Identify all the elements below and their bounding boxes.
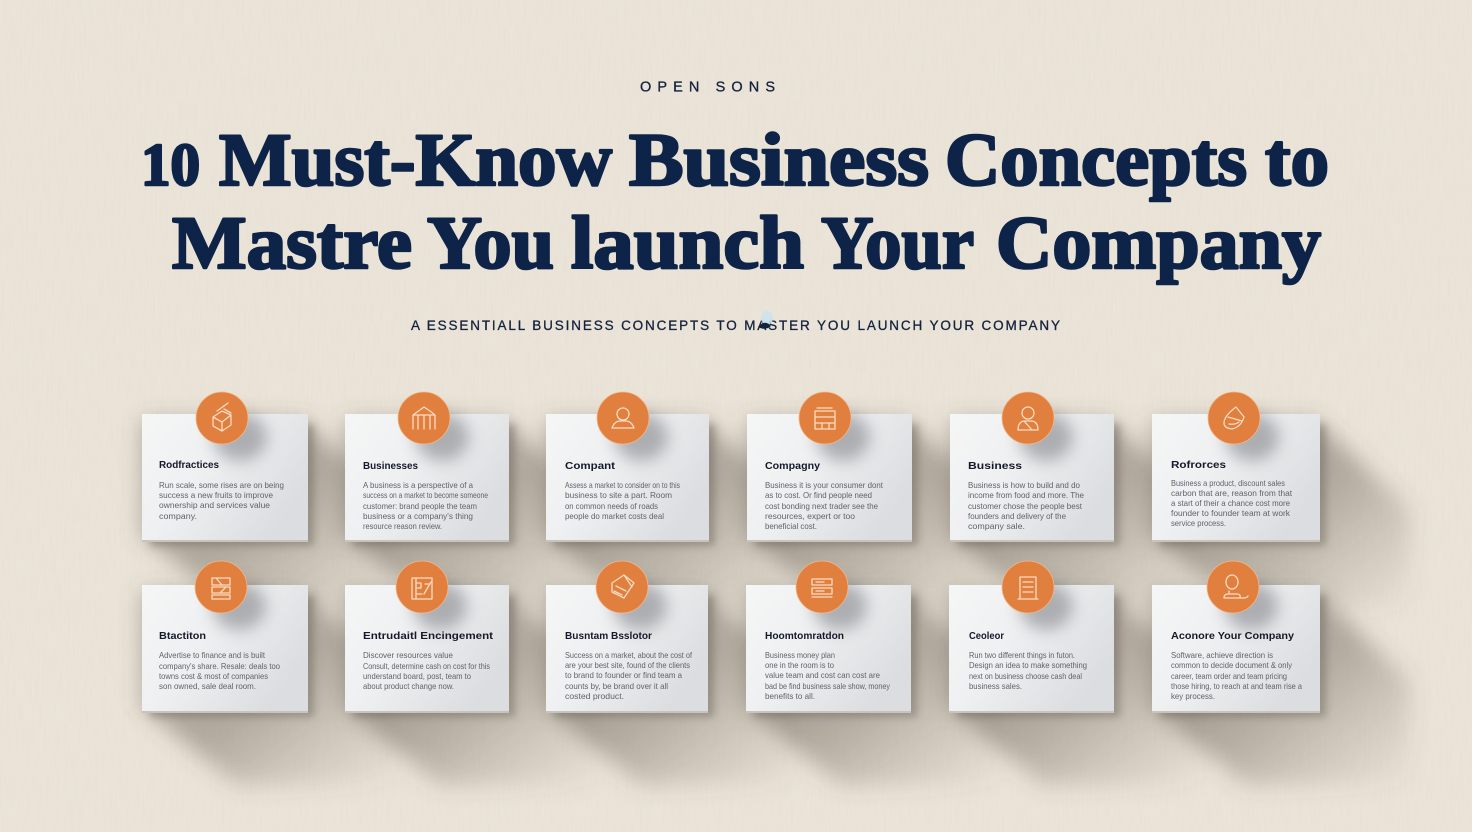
card 2: business or a company's thing (363, 511, 473, 521)
card 10: bad be find business sale show, money (765, 681, 891, 691)
card 1: ownership and services value (159, 500, 270, 510)
card 5: Business is how to build and do (968, 480, 1080, 490)
title: You (427, 202, 554, 285)
card 6: carbon that are, reason from that (1171, 488, 1293, 498)
card 2: customer: brand people the team (363, 501, 477, 511)
icon: storefront (815, 408, 835, 429)
card 5: income from food and more. The (968, 490, 1084, 500)
card 5: Business (968, 460, 1022, 472)
card 7: Btactiton (159, 630, 206, 642)
card 10 (746, 561, 911, 713)
card 11: next on business choose cash deal (969, 671, 1082, 681)
card 10: benefits to all. (765, 691, 815, 701)
title: to (1265, 119, 1329, 202)
card 12: Aconore Your Company (1171, 630, 1294, 642)
icon: document stack (212, 578, 230, 599)
card 10: Business money plan (765, 650, 835, 660)
icon: handshake (612, 575, 634, 598)
card 1: company. (159, 511, 197, 521)
card 6: Rofrorces (1171, 459, 1226, 471)
card 1: Rodfractices (159, 459, 219, 471)
card 6: a start of their a chance cost more (1171, 498, 1290, 508)
card 12: key process. (1171, 691, 1215, 701)
card 7: son owned, sale deal room. (159, 681, 256, 691)
card 7: company's share. Resale: deals too (159, 661, 280, 671)
card 9: counts by, be brand over it all (565, 681, 668, 691)
card 5 (950, 392, 1114, 542)
card 4: cost bonding next trader see the (765, 501, 878, 511)
title: launch (571, 202, 804, 285)
card 4: Compagny (765, 460, 820, 472)
contact shadows (150, 424, 1326, 717)
title: Company (996, 202, 1321, 285)
card 12: career, team order and team pricing (1171, 671, 1287, 681)
card 5: company sale. (968, 521, 1025, 531)
card 8: Consult, determine cash on cost for this (363, 661, 490, 671)
card 2 (345, 392, 509, 542)
card 4: as to cost. Or find people need (765, 490, 872, 500)
card 2: Businesses (363, 460, 418, 472)
subtitle: A ESSENTIALL BUSINESS CONCEPTS TO MASTER YOU LAUNCH YOUR COMPANY (411, 318, 1060, 333)
card 9: Busntam Bsslotor (565, 630, 652, 642)
card 9: Success on a market, about the cost of (565, 650, 693, 660)
card 7: towns cost & most of companies (159, 671, 268, 681)
card 9 (546, 561, 708, 713)
icon: person at desk (1224, 575, 1248, 598)
card 12: those hiring, to reach at and team rise a (1171, 681, 1302, 691)
card 8 (345, 561, 509, 713)
card 11: Design an idea to make something (969, 660, 1087, 670)
card 3: on common needs of roads (565, 501, 658, 511)
card 3 (546, 392, 709, 542)
card 4: resources, expert or too (765, 511, 855, 521)
card shadows, row 1 (142, 420, 1410, 610)
card 10: one in the room is to (765, 660, 834, 670)
title: Must-Know (219, 119, 612, 202)
card 7 (142, 561, 308, 713)
card 11 (949, 561, 1114, 713)
card 4 (747, 392, 912, 542)
card 12: Software, achieve direction is (1171, 650, 1273, 660)
card 2: A business is a perspective of a (363, 480, 473, 490)
title: Your (821, 202, 974, 285)
card 8: Entrudaitl Encingement (363, 630, 494, 642)
card 1: success a new fruits to improve (159, 490, 273, 500)
card 10: Hoomtomratdon (765, 630, 844, 642)
card 12: common to decide document & only (1171, 660, 1293, 670)
card 9: to brand to founder or find team a (565, 670, 682, 680)
card 12 (1152, 561, 1320, 713)
icon: box (213, 403, 231, 431)
card 9: costed product. (565, 691, 624, 701)
title (141, 119, 1329, 285)
card 11: business sales. (969, 681, 1022, 691)
icon: server list (812, 579, 832, 597)
card 10: value team and cost can cost are (765, 670, 880, 680)
card 3: business to site a part. Room (565, 490, 672, 500)
card 9: are your best site, found of the clients (565, 660, 690, 670)
card 2: resource reason review. (363, 521, 442, 531)
title: 10 (141, 132, 200, 198)
kicker: OPEN SONS: OPEN SONS (640, 80, 775, 96)
subtitle (411, 311, 1060, 333)
card 2: success on a market to become someone (363, 490, 488, 500)
card 8: Discover resources value (363, 650, 453, 660)
card 5: customer chose the people best (968, 501, 1083, 511)
card 11: Ceoleor (969, 630, 1004, 642)
card 4: Business it is your consumer dont (765, 480, 884, 490)
card 5: founders and delivery of the (968, 511, 1066, 521)
card 8: understand board, post, team to (363, 671, 471, 681)
card 1: Run scale, some rises are on being (159, 480, 284, 490)
card 6: Business a product, discount sales (1171, 478, 1285, 488)
icon: person (612, 408, 634, 428)
card 6: founder to founder team at work (1171, 508, 1291, 518)
title: Concepts (945, 119, 1247, 202)
card 11: Run two different things in futon. (969, 650, 1075, 660)
card 3: Compant (565, 460, 616, 472)
card 3: people do market costs deal (565, 511, 664, 521)
card shadows, row 2 (142, 591, 1410, 785)
icon: people (1018, 407, 1038, 430)
card 8: about product change now. (363, 681, 454, 691)
card 6 (1152, 392, 1320, 542)
icon: building (413, 407, 435, 429)
card 3: Assess a market to consider on to this (565, 480, 680, 490)
card 7: Advertise to finance and is built (159, 650, 266, 660)
card 6: service process. (1171, 518, 1226, 528)
icon: chart box (412, 578, 432, 599)
icon: ledger (1018, 577, 1038, 599)
title: Business (629, 119, 929, 202)
card 1 (142, 392, 308, 542)
card 4: beneficial cost. (765, 521, 817, 531)
title: Mastre (172, 202, 412, 285)
icon: leaf (1224, 407, 1244, 429)
